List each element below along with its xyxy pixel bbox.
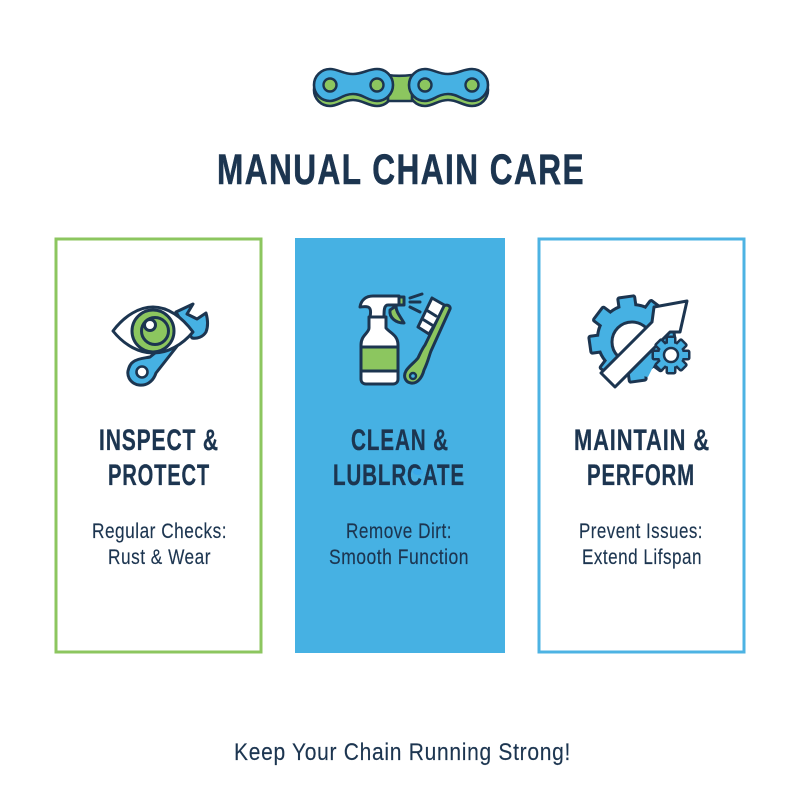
text: regular checks: Rust & Wear bbox=[108, 546, 211, 569]
heading: clean and lubricate: LUBLRCATE bbox=[333, 459, 465, 492]
text: prevent issues: Prevent Issues: bbox=[579, 520, 703, 543]
panel: clean and lubricate bbox=[295, 238, 505, 653]
heading: clean and lubricate: CLEAN & bbox=[351, 424, 449, 457]
heading: inspect and protect: INSPECT & bbox=[99, 424, 219, 457]
heading: inspect and protect bbox=[99, 424, 219, 492]
panel: inspect and protect bbox=[56, 239, 261, 652]
text: prevent issues bbox=[579, 520, 703, 569]
heading: maintain and perform bbox=[574, 424, 710, 492]
heading: clean and lubricate bbox=[333, 424, 465, 492]
heading: maintain and perform: MAINTAIN & bbox=[574, 424, 710, 457]
icon: eye with wrench bbox=[113, 304, 208, 385]
icon: gears with arrow bbox=[590, 297, 688, 387]
icon: spray bottle and brush bbox=[360, 294, 450, 384]
text: remove dirt: Smooth Function bbox=[329, 546, 469, 569]
panel border: inspect bbox=[56, 239, 261, 652]
icon: bicycle chain bbox=[314, 69, 488, 106]
footer tagline: Keep Your Chain Running Strong! bbox=[234, 739, 571, 766]
text: prevent issues: Extend Lifspan bbox=[582, 546, 702, 569]
text: regular checks: Regular Checks: bbox=[92, 520, 227, 543]
text: remove dirt: Remove Dirt: bbox=[346, 520, 452, 543]
panel: maintain and perform bbox=[539, 239, 744, 652]
title: MANUAL CHAIN CARE bbox=[217, 146, 585, 194]
text: regular checks bbox=[92, 520, 227, 569]
heading: maintain and perform: PERFORM bbox=[587, 459, 695, 492]
text: remove dirt bbox=[329, 520, 469, 569]
panel border: maintain bbox=[539, 239, 744, 652]
panel background: clean bbox=[295, 238, 505, 653]
heading: inspect and protect: PROTECT bbox=[108, 459, 210, 492]
